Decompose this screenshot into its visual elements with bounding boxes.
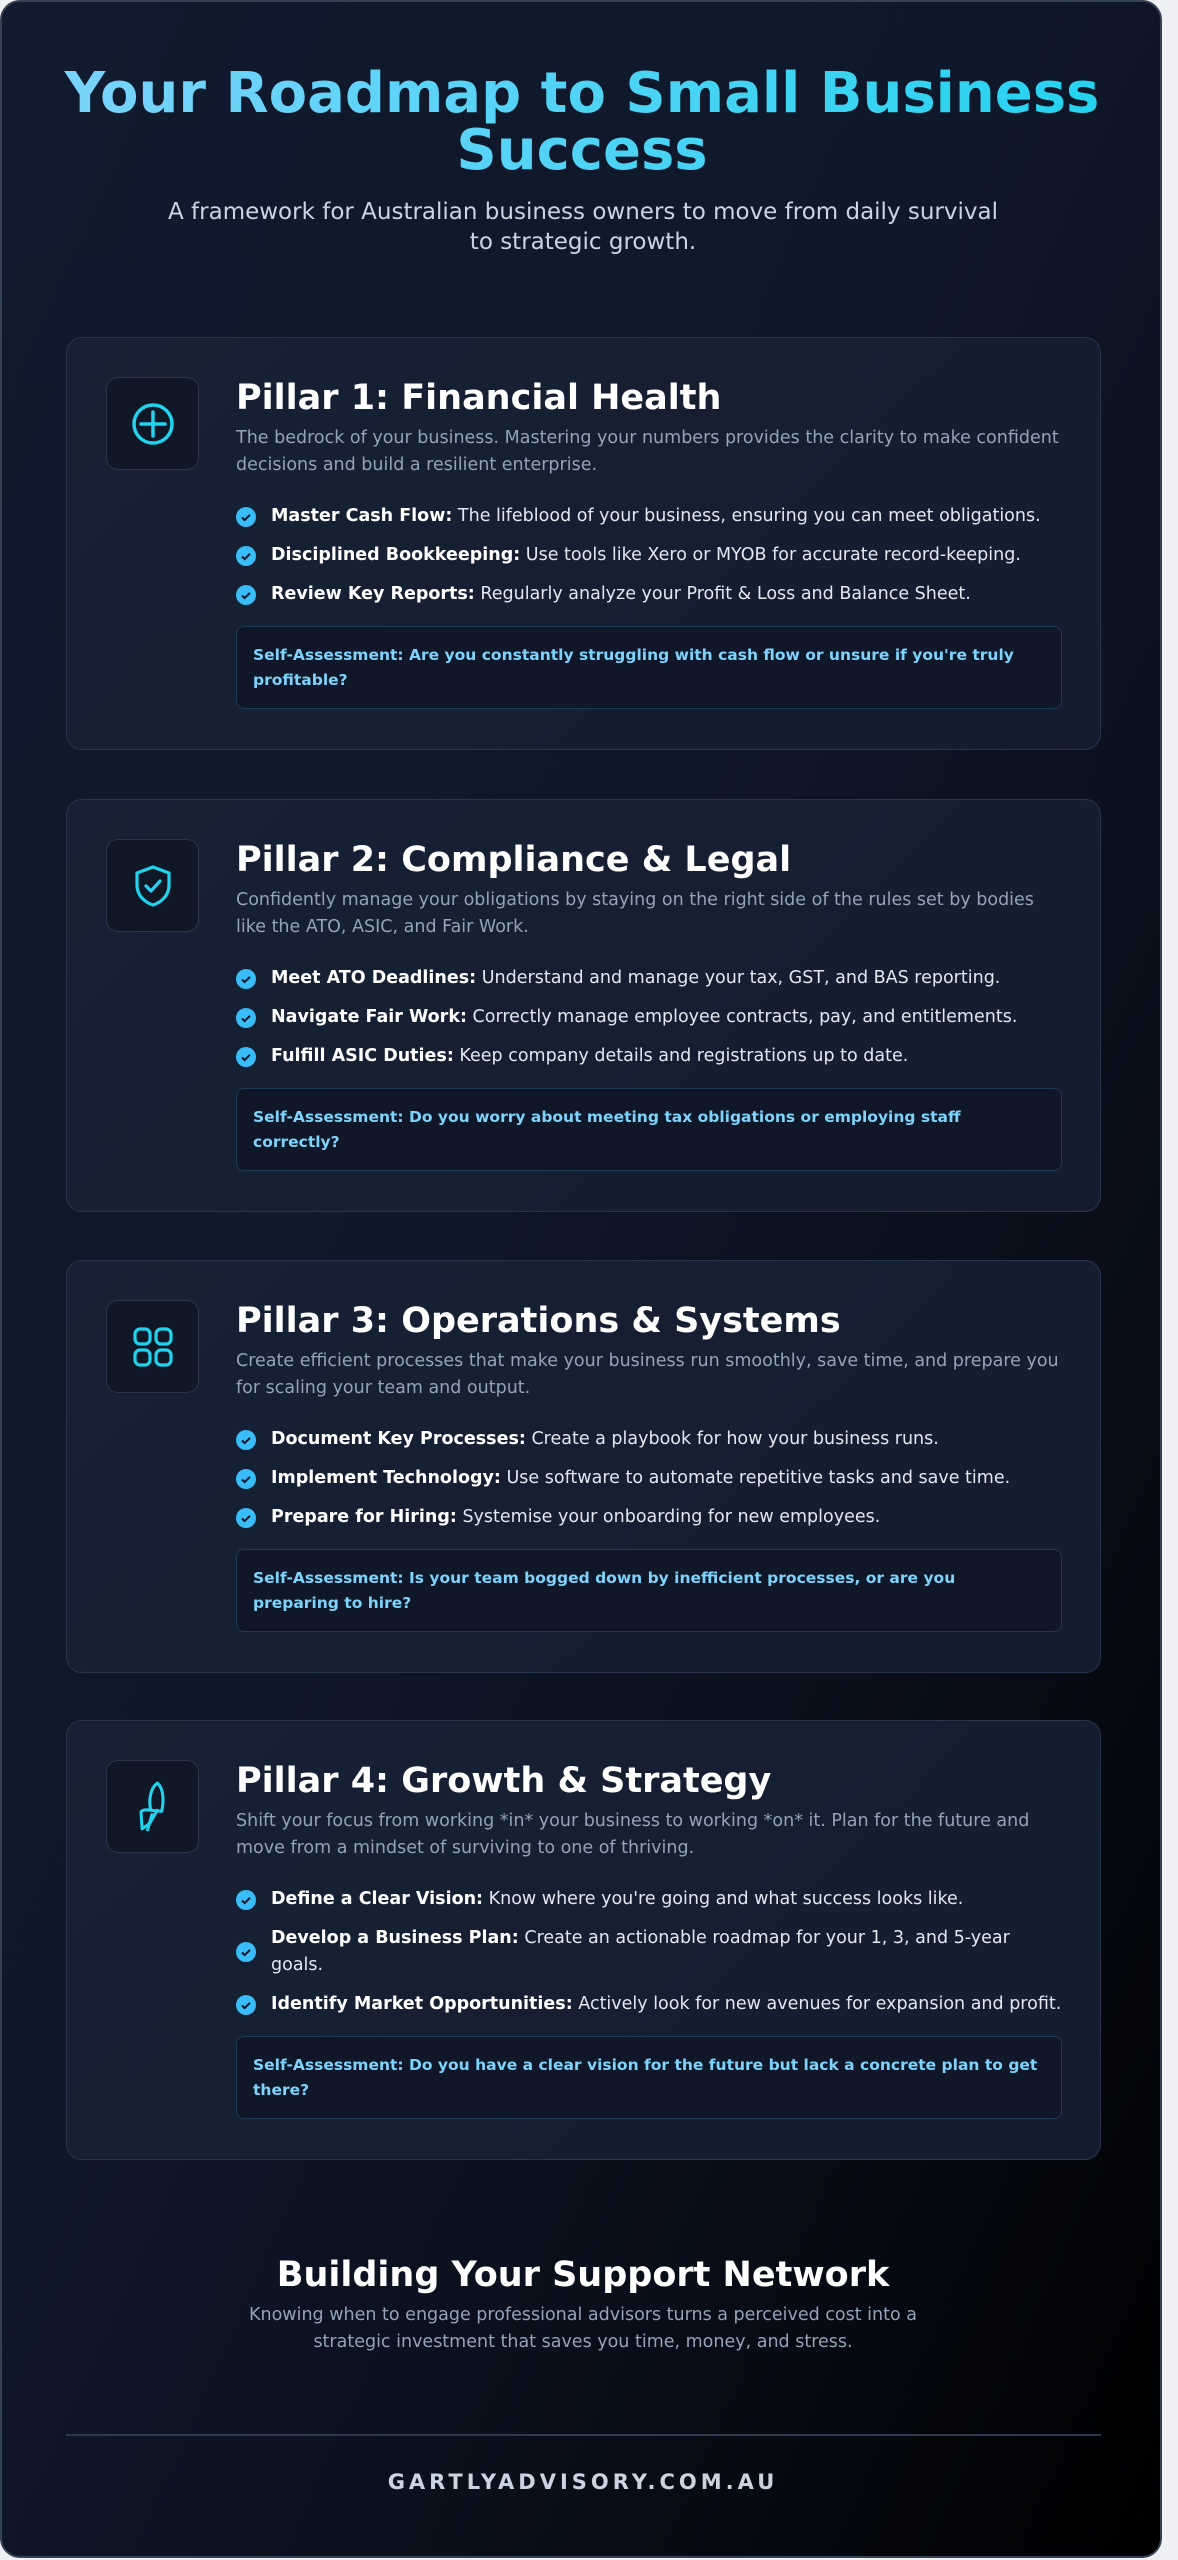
callout: self-assessment: correctly? xyxy=(253,1133,340,1151)
callout: self-assessment xyxy=(236,1549,1062,1632)
description: move from a mindset of surviving to one of thriving. xyxy=(236,1838,694,1858)
callout: self-assessment: Self-Assessment: Are you constantly struggling with cash flow or unsure if you're truly profitable? xyxy=(253,646,1014,689)
description: like the ATO, ASIC, and Fair Work. xyxy=(236,917,529,937)
heading: Pillar 3: Operations & Systems xyxy=(236,1301,841,1341)
description: Create efficient processes that make your business run smoothly, save time, and prepare you for scaling your team and output. xyxy=(236,1351,1059,1398)
subtitle: A framework for Australian business owners to move from daily survival xyxy=(168,199,998,225)
checklist: Navigate Fair Work: Correctly manage employee contracts, pay, and entitlements. xyxy=(271,1007,1017,1027)
subtitle xyxy=(168,199,998,255)
subtitle: to strategic growth. xyxy=(470,229,696,255)
checklist: Fulfill ASIC Duties: Keep company details and registrations up to date. xyxy=(271,1046,908,1066)
icon: rocket xyxy=(106,1760,199,1853)
icon: grid xyxy=(106,1300,199,1393)
description: Confidently manage your obligations by staying on the right side of the rules set by bodies xyxy=(236,890,1034,910)
panel: pillar 1 xyxy=(66,337,1101,750)
heading: Pillar 4: Growth & Strategy xyxy=(236,1761,771,1801)
panel: pillar 2 xyxy=(66,799,1101,1212)
checklist: Disciplined Bookkeeping: Use tools like Xero or MYOB for accurate record-keeping. xyxy=(271,545,1021,565)
checklist xyxy=(236,968,1017,1067)
checklist: goals. xyxy=(271,1955,323,1975)
callout: self-assessment xyxy=(236,1088,1062,1171)
icon: plus circle xyxy=(106,377,199,470)
callout: self-assessment: preparing to hire? xyxy=(253,1594,411,1612)
checklist: Develop a Business Plan: Create an actionable roadmap for your 1, 3, and 5-year xyxy=(271,1928,1010,1948)
checklist: Review Key Reports: Regularly analyze your Profit & Loss and Balance Sheet. xyxy=(271,584,971,604)
title: Your Roadmap to Small Business Success xyxy=(65,61,1099,183)
heading: Pillar 1: Financial Health xyxy=(236,378,721,418)
panel: pillar 3 xyxy=(66,1260,1101,1673)
checklist xyxy=(236,506,1041,605)
description xyxy=(236,890,1034,937)
callout: self-assessment: Self-Assessment: Do you worry about meeting tax obligations or employing staff xyxy=(253,1108,961,1126)
checklist: Document Key Processes: Create a playbook for how your business runs. xyxy=(271,1429,939,1449)
panel: pillar 4 xyxy=(66,1720,1101,2160)
checklist: Master Cash Flow: The lifeblood of your business, ensuring you can meet obligations. xyxy=(271,506,1041,526)
description xyxy=(236,1811,1029,1858)
footer: GARTLYADVISORY.COM.AU xyxy=(388,2470,778,2494)
checklist: Prepare for Hiring: Systemise your onboarding for new employees. xyxy=(271,1507,880,1527)
heading: support network: Building Your Support Network xyxy=(277,2255,889,2295)
callout: self-assessment xyxy=(236,626,1062,709)
checklist xyxy=(236,1429,1010,1528)
icon: shield xyxy=(106,839,199,932)
text: support network: Knowing when to engage professional advisors turns a perceived cost into a strategic investment that saves you time, money, and stress. xyxy=(249,2305,917,2352)
checklist: Implement Technology: Use software to automate repetitive tasks and save time. xyxy=(271,1468,1010,1488)
checklist xyxy=(236,1889,1061,2015)
checklist: Meet ATO Deadlines: Understand and manage your tax, GST, and BAS reporting. xyxy=(271,968,1000,988)
description: Shift your focus from working *in* your business to working *on* it. Plan for the future and xyxy=(236,1811,1029,1831)
callout: self-assessment: Self-Assessment: Is your team bogged down by inefficient processes, or are you xyxy=(253,1569,955,1587)
checklist: Define a Clear Vision: Know where you're going and what success looks like. xyxy=(271,1889,963,1909)
description: The bedrock of your business. Mastering your numbers provides the clarity to make confident decisions and build a resilient enterprise. xyxy=(236,428,1059,475)
checklist: Identify Market Opportunities: Actively look for new avenues for expansion and profit. xyxy=(271,1994,1061,2014)
callout: self-assessment xyxy=(236,2036,1062,2119)
callout: self-assessment: Self-Assessment: Do you have a clear vision for the future but lack a concrete plan to get there? xyxy=(253,2056,1037,2099)
heading: Pillar 2: Compliance & Legal xyxy=(236,840,791,880)
